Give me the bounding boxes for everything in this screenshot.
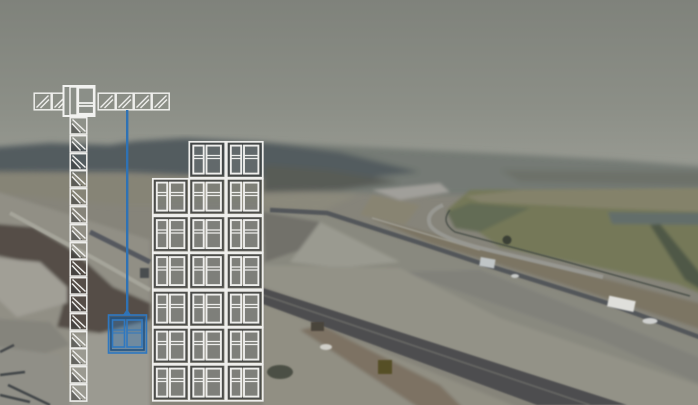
hills xyxy=(263,142,698,195)
graded ground xyxy=(263,210,698,405)
fields xyxy=(447,188,698,297)
buildings in distance xyxy=(372,183,450,200)
modular building xyxy=(153,142,263,401)
service road xyxy=(429,205,603,277)
vehicles and machinery xyxy=(140,236,658,379)
hoisted module (blue) xyxy=(108,315,146,353)
crane jib xyxy=(34,93,169,110)
left debris xyxy=(0,345,14,352)
floor 3 xyxy=(153,291,263,327)
left road xyxy=(90,232,150,262)
lower road xyxy=(263,288,627,405)
floor 5 xyxy=(153,216,263,252)
crane xyxy=(34,86,169,401)
crane mast xyxy=(70,118,87,401)
floor 2 xyxy=(153,328,263,364)
floor 1 xyxy=(153,365,263,401)
foreground left xyxy=(0,188,150,405)
floor 6 xyxy=(153,179,263,215)
highway xyxy=(270,210,698,341)
floor 7 xyxy=(189,142,263,178)
floor 4 xyxy=(153,253,263,289)
strip beside highway xyxy=(370,218,698,332)
background: sky xyxy=(0,0,698,180)
background: landscape xyxy=(0,138,698,405)
hoist cable xyxy=(123,110,131,315)
crane cab xyxy=(64,86,94,116)
